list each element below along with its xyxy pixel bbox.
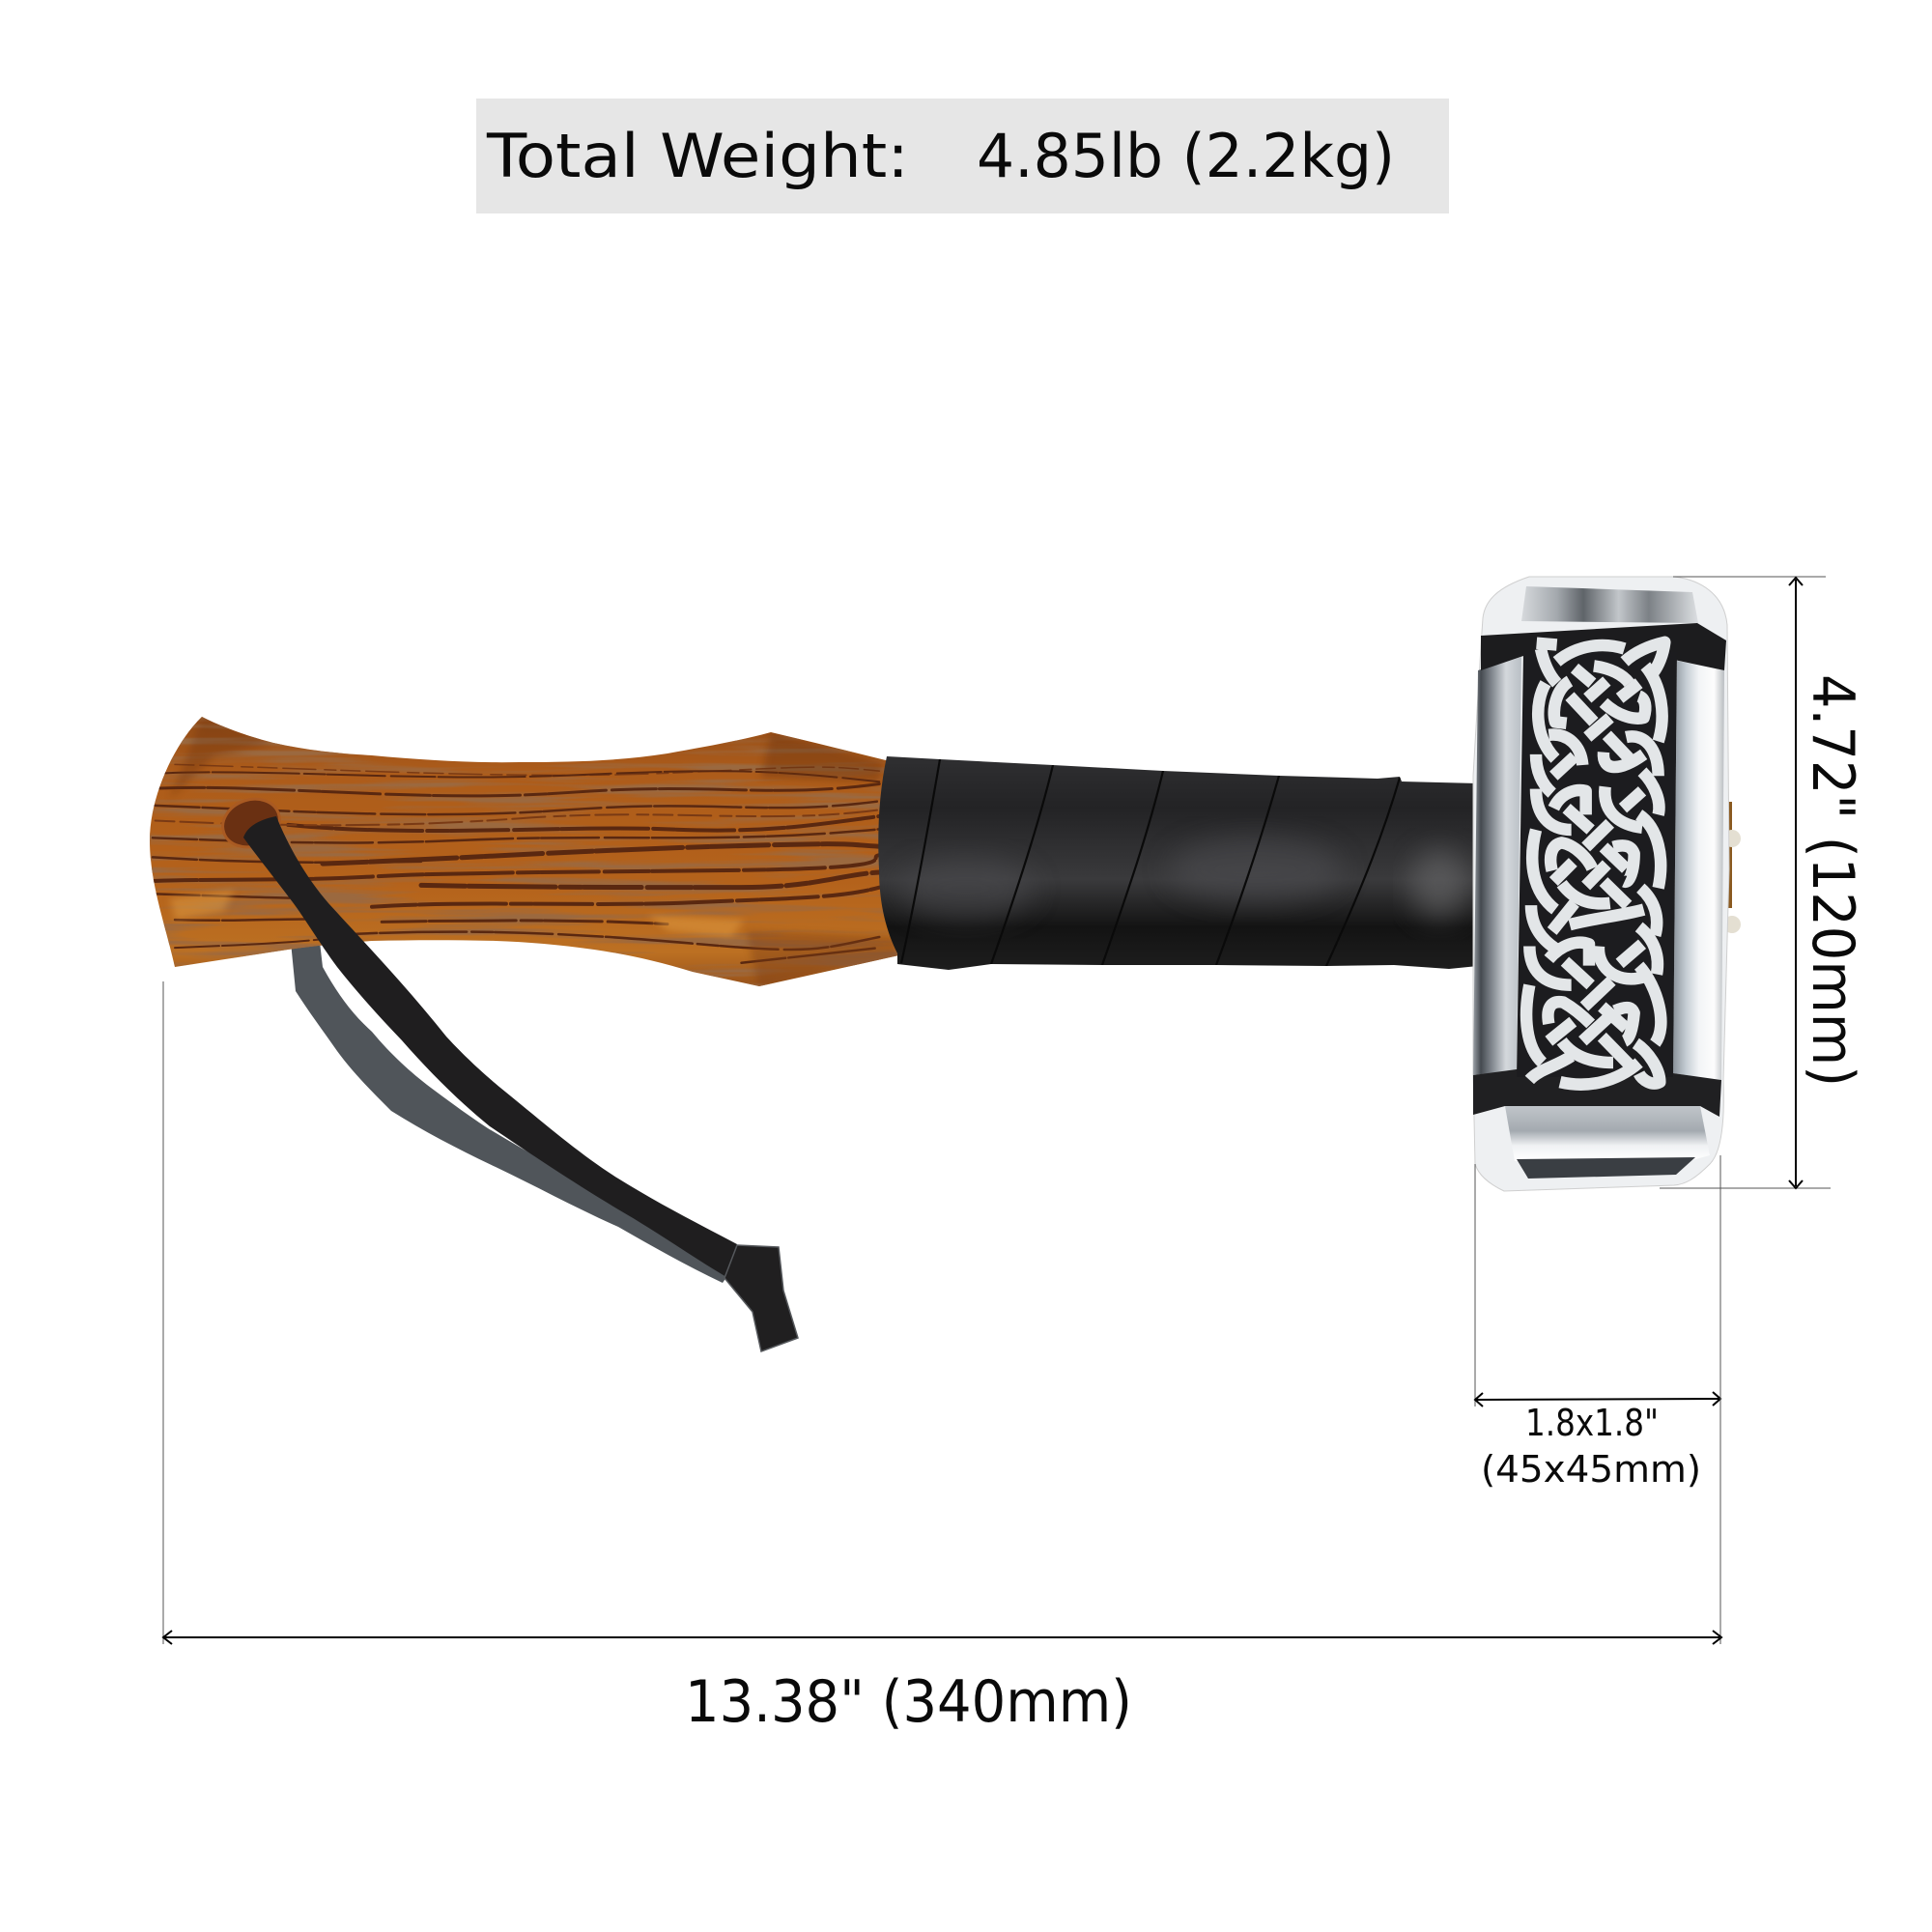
leather wrapped handle bbox=[874, 753, 1483, 971]
leather strap front bbox=[243, 816, 737, 1277]
hammer head bbox=[1473, 577, 1741, 1191]
head width dimension bbox=[1475, 1164, 1720, 1491]
lanyard hole bbox=[216, 791, 286, 855]
total weight value: 4.85lb (2.2kg) bbox=[977, 121, 1395, 191]
right polished face bbox=[1673, 661, 1724, 1080]
wooden grip bbox=[145, 710, 908, 995]
bottom polished face bbox=[1505, 1106, 1710, 1161]
height label: 4.72" (120mm) bbox=[1799, 674, 1866, 1087]
back rivets bbox=[1723, 802, 1741, 933]
bottom dark bevel bbox=[1517, 1157, 1695, 1179]
head width arrow bbox=[1475, 1392, 1720, 1406]
height arrow bbox=[1789, 578, 1803, 1188]
total weight banner bbox=[476, 99, 1449, 213]
celtic knot engraving bbox=[1526, 642, 1664, 1085]
total weight label: Total Weight: bbox=[486, 121, 909, 191]
head width label line 2: (45x45mm) bbox=[1481, 1448, 1701, 1491]
top black band bbox=[1481, 623, 1726, 670]
black knot panel bbox=[1517, 652, 1677, 1077]
height extension lines bbox=[1660, 577, 1831, 1188]
top polished face bbox=[1521, 586, 1698, 623]
left polished face bbox=[1473, 657, 1521, 1075]
length extension lines bbox=[163, 981, 1720, 1644]
height dimension bbox=[1660, 577, 1866, 1188]
length label: 13.38" (340mm) bbox=[685, 1668, 1132, 1736]
length arrow bbox=[163, 1631, 1721, 1644]
head silhouette bbox=[1473, 577, 1729, 1191]
head width extension line bbox=[1474, 1164, 1476, 1406]
banner panel bbox=[476, 99, 1449, 213]
strap knot bbox=[724, 1245, 798, 1351]
bottom black band bbox=[1473, 1069, 1721, 1117]
hammer bbox=[145, 577, 1741, 1351]
leather strap back bbox=[291, 942, 729, 1283]
head width label line 1: 1.8x1.8" bbox=[1525, 1402, 1659, 1444]
total length dimension bbox=[163, 981, 1721, 1736]
